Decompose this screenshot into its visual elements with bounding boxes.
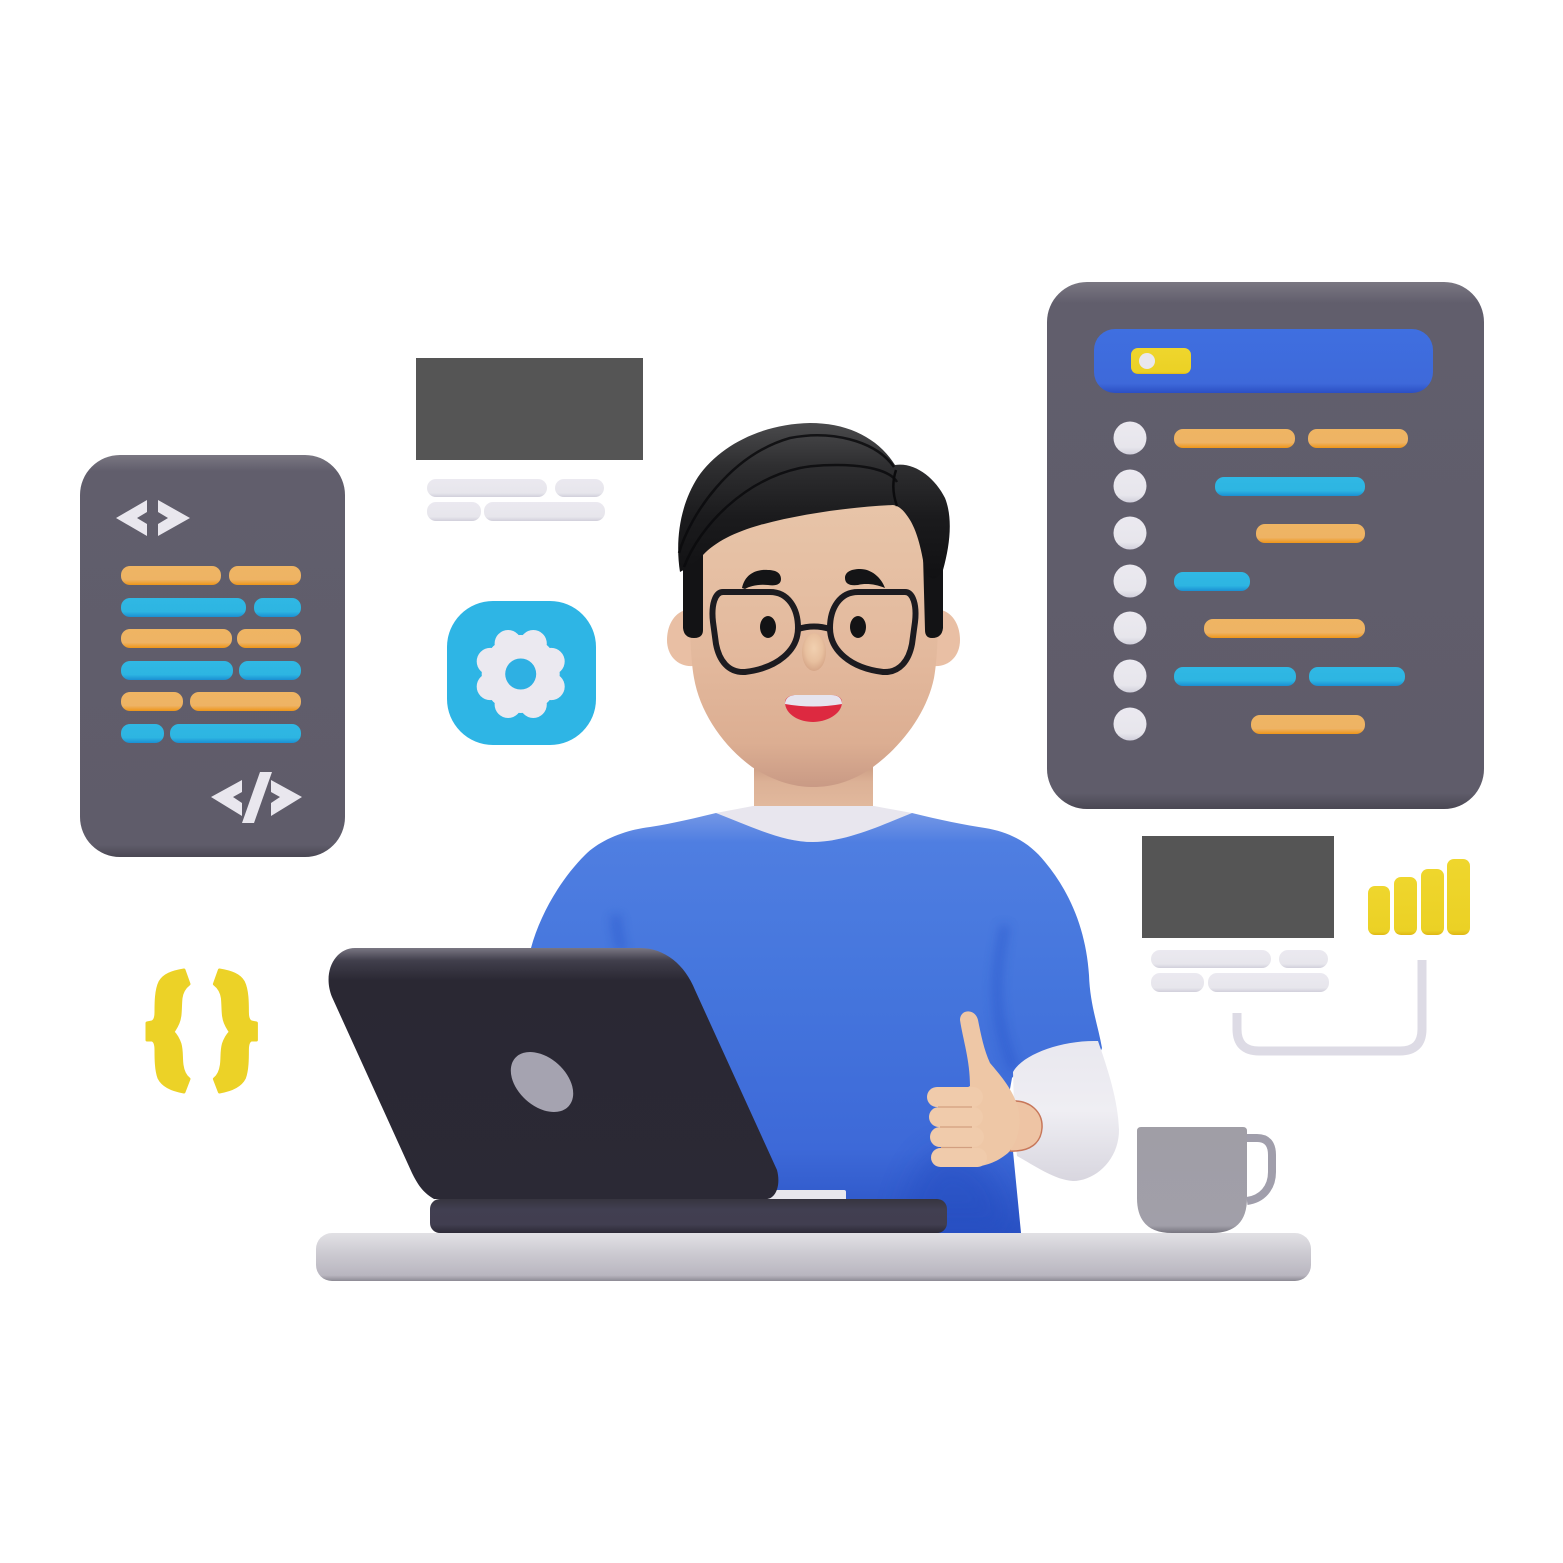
white undershirt arm (1013, 1041, 1119, 1181)
icon: settings gear tile (447, 601, 596, 745)
laptop lid (329, 948, 778, 1199)
window title bar (1094, 329, 1433, 393)
line number dots (1114, 422, 1146, 740)
laptop logo (499, 1040, 585, 1124)
toggle switch (1131, 348, 1191, 374)
icon: closing tag (211, 772, 302, 823)
text placeholder pills: top centre (427, 479, 605, 521)
icon: angle brackets (116, 500, 190, 536)
text placeholder pills: lower right (1151, 950, 1329, 992)
laptop base (430, 1199, 947, 1233)
shirt (531, 813, 1102, 1233)
shirt shading (616, 915, 1014, 1233)
chart: yellow signal bars (1368, 859, 1470, 935)
hand: thumbs up (927, 1011, 1020, 1167)
ears (667, 610, 960, 666)
icon: curly braces (147, 970, 256, 1092)
mug (1137, 1127, 1272, 1233)
neck (754, 755, 873, 815)
hair (678, 423, 950, 638)
connector line (1237, 960, 1422, 1051)
image placeholder: top centre (416, 358, 643, 460)
eyebrows (742, 569, 885, 589)
finger creases (938, 1107, 972, 1148)
mouth (785, 695, 842, 722)
panel: left code card (80, 455, 345, 857)
desk (316, 1233, 1311, 1281)
illustration: developer at a desk with code panels (80, 282, 1484, 1281)
eyes (760, 616, 866, 638)
code lines (1174, 429, 1408, 734)
nose (802, 633, 826, 671)
collar (716, 806, 912, 842)
wrist (1010, 1101, 1042, 1151)
laptop (329, 948, 947, 1233)
character: developer (531, 423, 1119, 1233)
face (690, 494, 938, 787)
panel: right code window (1047, 282, 1484, 809)
image placeholder: lower right (1142, 836, 1334, 938)
code lines (121, 566, 301, 743)
glasses (712, 592, 916, 672)
keyboard tab (765, 1190, 846, 1202)
